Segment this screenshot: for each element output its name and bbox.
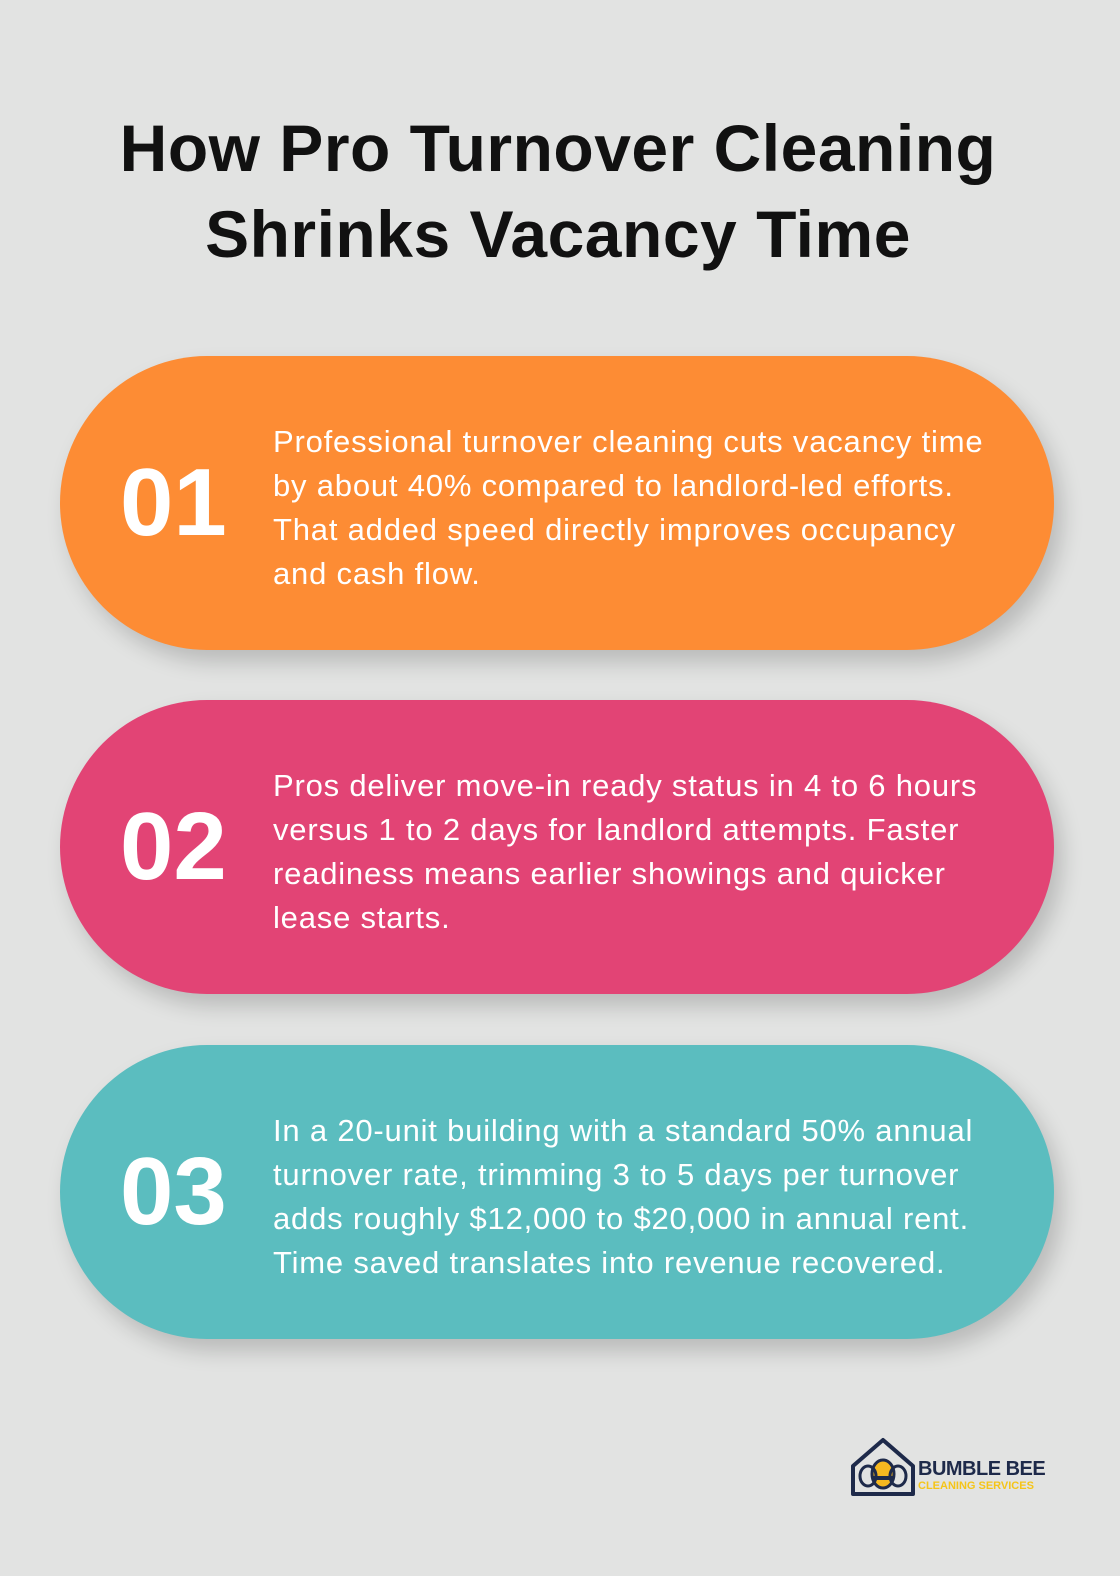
text 01: and cash flow. xyxy=(273,556,481,591)
title: How Pro Turnover Cleaning xyxy=(120,111,996,185)
panel: step 03 xyxy=(60,1045,1054,1339)
text 02: Pros deliver move-in ready status in 4 to 6 hours xyxy=(273,768,977,803)
logo text xyxy=(918,1458,1045,1492)
number 02: 02 xyxy=(120,793,227,900)
title xyxy=(120,111,996,271)
text 01 xyxy=(273,424,983,591)
number 03: 03 xyxy=(120,1138,227,1245)
text 02: readiness means earlier showings and quicker xyxy=(273,856,946,891)
logo text: CLEANING SERVICES xyxy=(918,1480,1034,1492)
panel: step 01 xyxy=(60,356,1054,650)
text 03: Time saved translates into revenue recovered. xyxy=(273,1245,945,1280)
text 02: lease starts. xyxy=(273,900,451,935)
logo xyxy=(851,1438,1045,1496)
text 01: by about 40% compared to landlord-led efforts. xyxy=(273,468,954,503)
icon: bee house xyxy=(851,1438,915,1496)
text 01: That added speed directly improves occupancy xyxy=(273,512,956,547)
text 02 xyxy=(273,768,977,935)
number 01: 01 xyxy=(120,449,227,556)
text 03: adds roughly $12,000 to $20,000 in annual rent. xyxy=(273,1201,969,1236)
text 02: versus 1 to 2 days for landlord attempts. Faster xyxy=(273,812,959,847)
text 01: Professional turnover cleaning cuts vacancy time xyxy=(273,424,983,459)
text 03: turnover rate, trimming 3 to 5 days per turnover xyxy=(273,1157,959,1192)
logo text: BUMBLE BEE xyxy=(918,1458,1045,1480)
text 03: In a 20-unit building with a standard 50% annual xyxy=(273,1113,973,1148)
panel: step 02 xyxy=(60,700,1054,994)
title: Shrinks Vacancy Time xyxy=(205,197,911,271)
text 03 xyxy=(273,1113,973,1280)
